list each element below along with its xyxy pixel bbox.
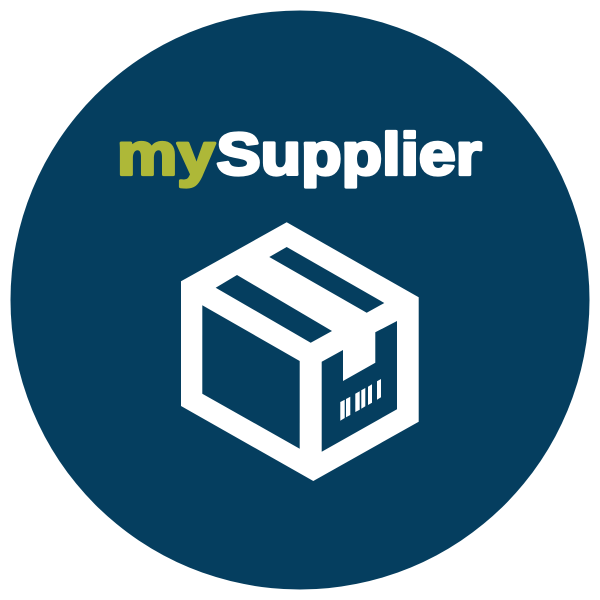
box top slot rear [269, 247, 384, 313]
box right face with tape [322, 321, 397, 452]
title: mySupplier [117, 122, 482, 188]
box top slot front [216, 275, 332, 343]
box outline [181, 222, 419, 481]
title word: Supplier: Supplier [216, 122, 482, 188]
box left face [202, 305, 300, 449]
title word: my: my [117, 122, 215, 188]
barcode [340, 379, 381, 421]
icon: cardboard box [181, 222, 419, 481]
